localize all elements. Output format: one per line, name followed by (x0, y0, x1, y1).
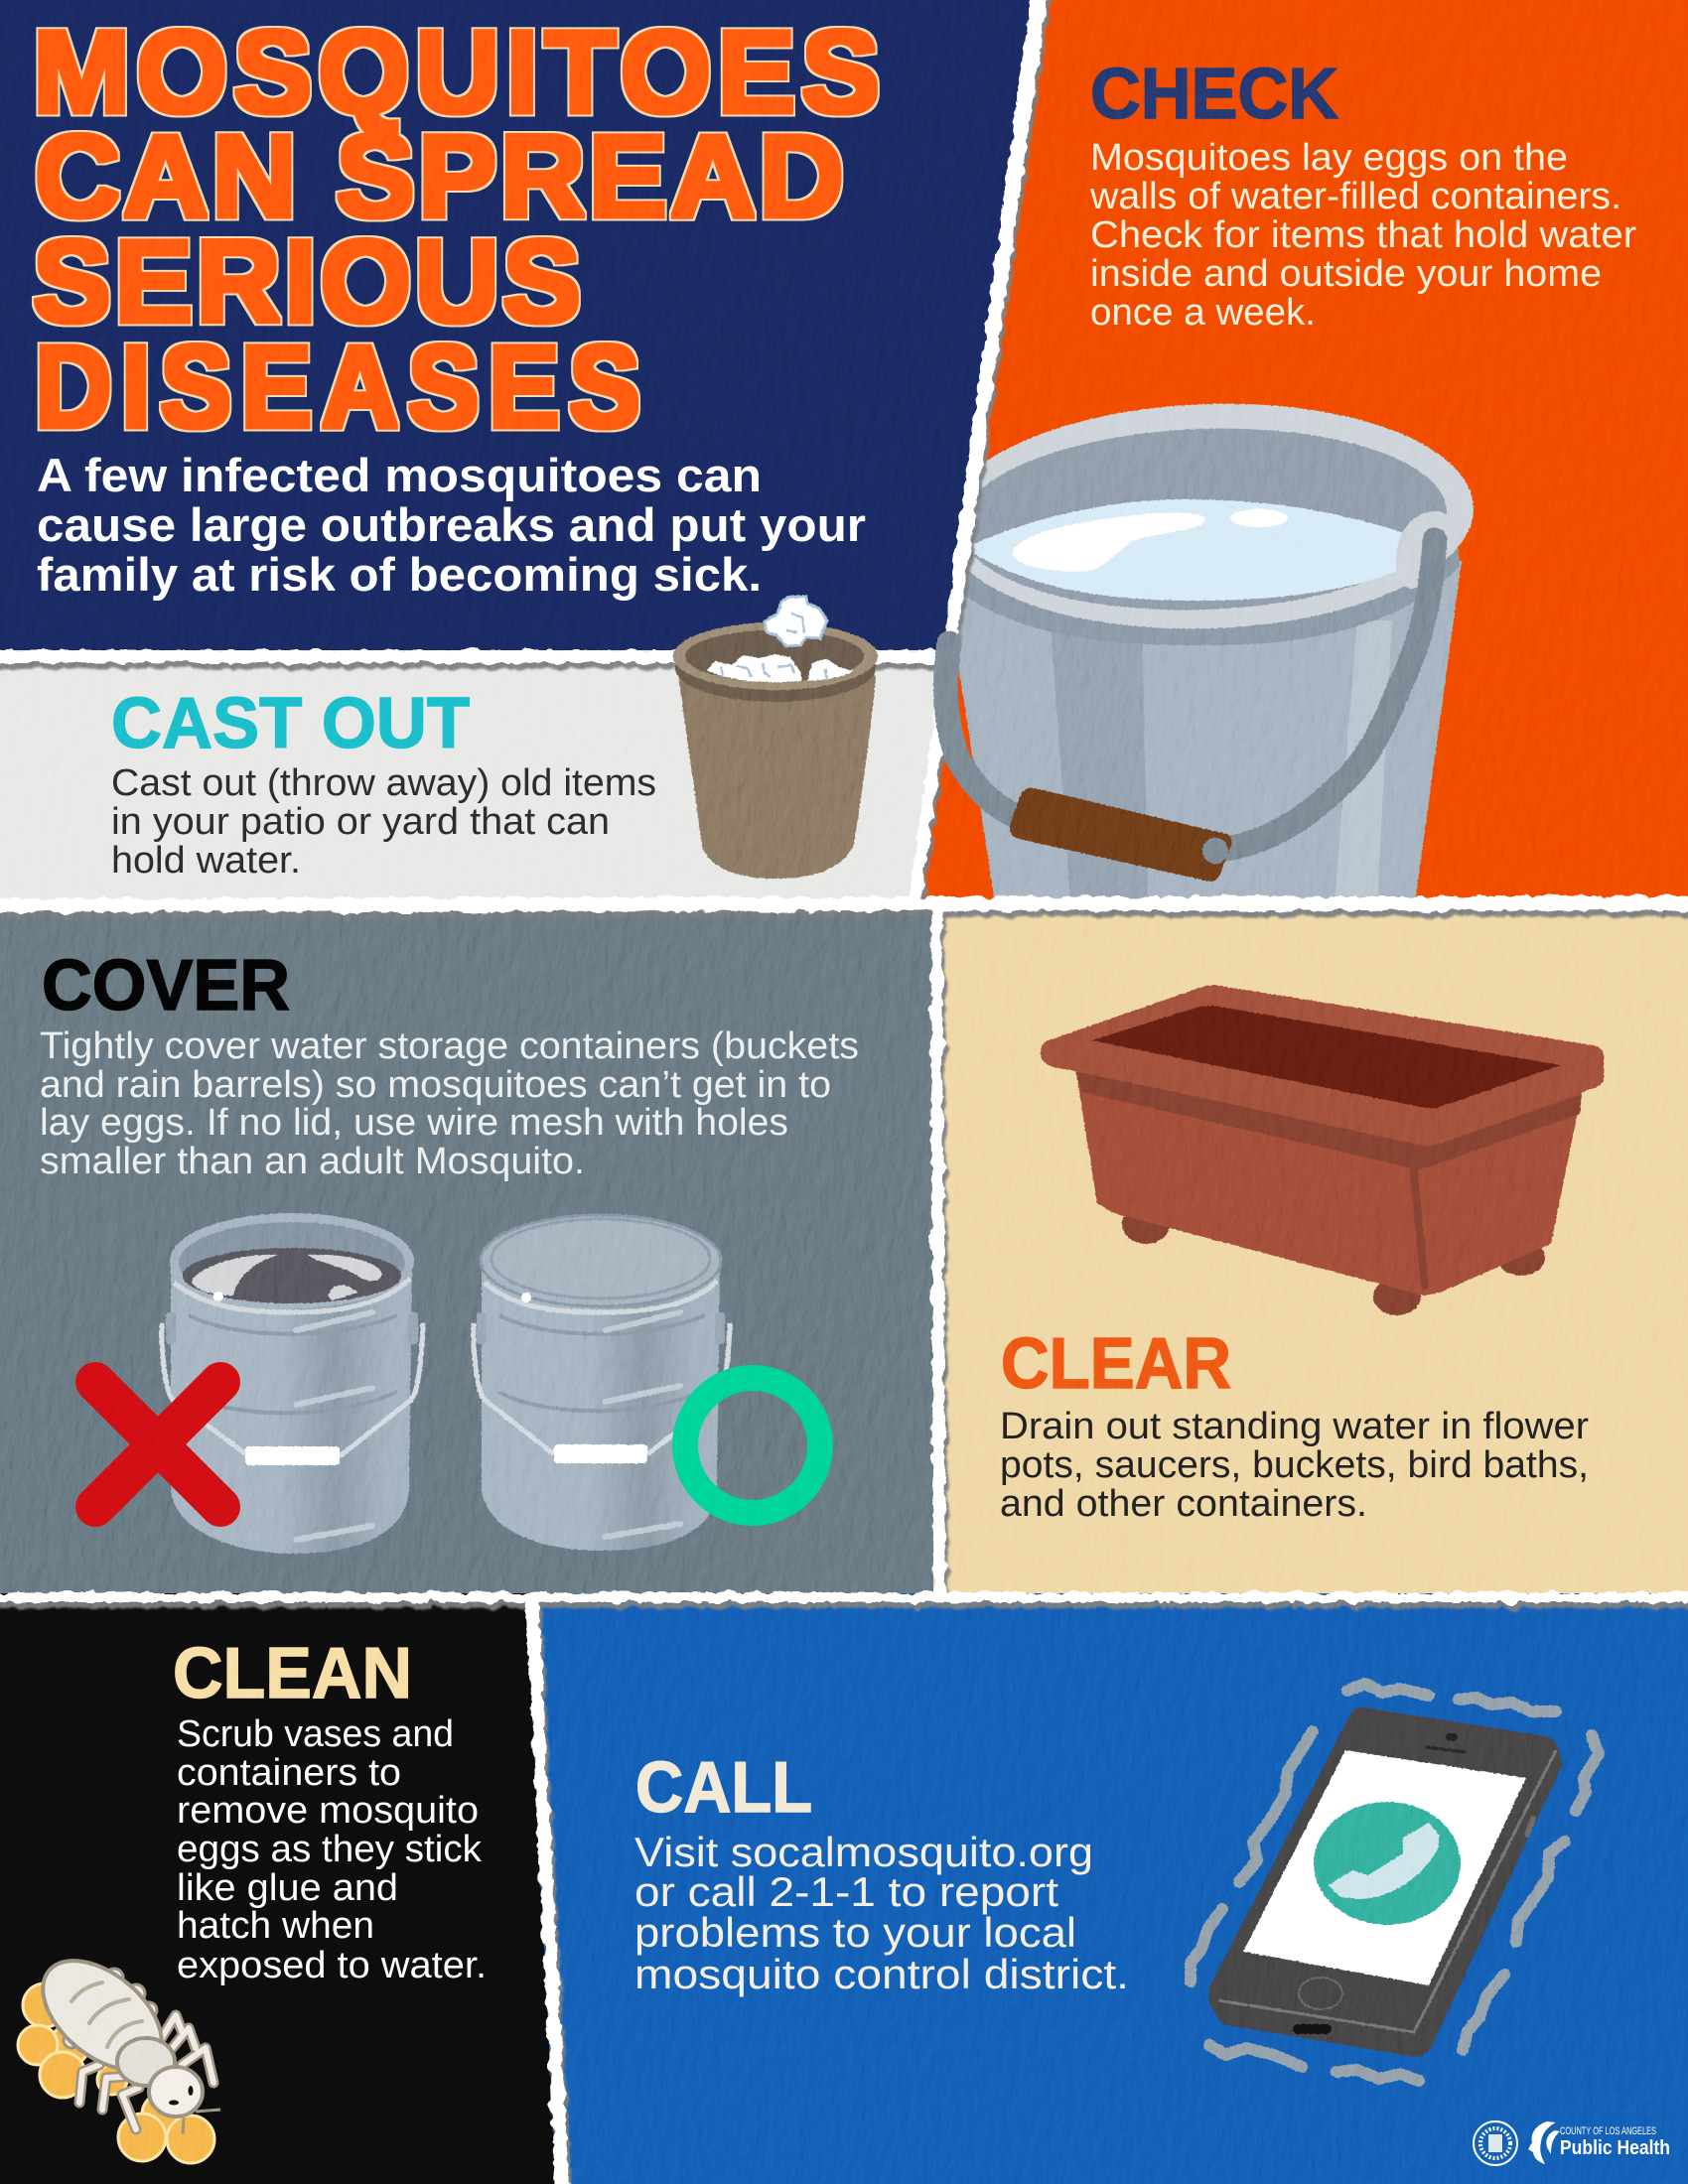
text: clean body: Scrub vases and (177, 1713, 454, 1755)
text: call body (634, 1829, 1129, 1997)
text: cast out body: Cast out (throw away) old items (111, 762, 656, 804)
text: check body: walls of water-filled containers. (1089, 176, 1621, 217)
text: clear body: pots, saucers, buckets, bird baths, (1000, 1444, 1589, 1486)
text: cover body (40, 1025, 859, 1182)
panel: clear (933, 905, 1688, 1595)
text: clean body: remove mosquito (177, 1790, 479, 1832)
text: clean body: eggs as they stick (177, 1829, 483, 1870)
text: clean body (177, 1713, 487, 1986)
heading: cast out: CAST OUT (111, 684, 470, 763)
text: subtitle: A few infected mosquitoes can (37, 449, 762, 501)
text: subtitle: cause large outbreaks and put your (37, 498, 866, 551)
icon: trash can (673, 597, 878, 879)
text: clear body (1000, 1406, 1589, 1525)
icon: green circle (685, 1378, 820, 1513)
text: clean body: like glue and (177, 1867, 398, 1909)
panel: cast out (0, 650, 948, 908)
title: SERIOUS (33, 216, 581, 347)
panel: cover (0, 905, 938, 1595)
text: check body (1089, 137, 1636, 334)
title: CAN SPREAD (35, 111, 844, 242)
text: clean body: hatch when (177, 1905, 374, 1947)
heading: cover: COVER (42, 946, 290, 1025)
title: DISEASES (35, 321, 640, 452)
text: call body: or call 2-1-1 to report (634, 1868, 1058, 1915)
text: clear body: Drain out standing water in flower (1000, 1406, 1589, 1447)
text: clean body: exposed to water. (177, 1945, 487, 1986)
text: check body: once a week. (1090, 292, 1316, 334)
text: clean body: containers to (177, 1752, 401, 1794)
text: check body: inside and outside your home (1090, 253, 1602, 295)
text: call body: Visit socalmosquito.org (634, 1829, 1093, 1875)
text: check body: Check for items that hold water (1090, 214, 1636, 256)
icon: planter box (1041, 985, 1604, 1315)
text: subtitle: family at risk of becoming sick. (37, 548, 762, 601)
text: call body: problems to your local (634, 1909, 1076, 1956)
text: cast out body: in your patio or yard that can (111, 801, 610, 843)
logo: county seal and public health (1474, 2121, 1670, 2165)
icon: covered pail (474, 1215, 730, 1551)
text: check body: Mosquitoes lay eggs on the (1090, 137, 1568, 179)
panel: clean (0, 1593, 566, 2184)
text: clear body: and other containers. (1000, 1483, 1367, 1525)
text: cover body: lay eggs. If no lid, use wire mesh with holes (40, 1102, 788, 1144)
icon: water bucket (939, 395, 1477, 903)
text: public health: Public Health (1560, 2137, 1670, 2159)
heading: check: CHECK (1090, 55, 1338, 134)
title (33, 7, 880, 452)
icon: uncovered pail (162, 1213, 423, 1554)
icon: larva and eggs (18, 1940, 220, 2163)
icon: county seal (1474, 2121, 1517, 2165)
panel: call (526, 1593, 1688, 2184)
text: cover body: and rain barrels) so mosquitoes can’t get in to (40, 1064, 831, 1106)
text: cast out body: hold water. (111, 840, 301, 882)
icon: vibrating phone (1191, 1684, 1599, 2081)
text: call body: mosquito control district. (634, 1951, 1129, 1997)
text: cover body: smaller than an adult Mosquito. (40, 1141, 585, 1182)
icon: red x (95, 1382, 220, 1507)
panel: header (0, 0, 1041, 665)
icon: bucket handle and grip (946, 643, 1231, 882)
heading: clean: CLEAN (173, 1634, 412, 1713)
text: cast out body (111, 762, 656, 882)
text: subtitle (37, 449, 866, 601)
heading: clear: CLEAR (1001, 1324, 1231, 1404)
text: cover body: Tightly cover water storage containers (buckets (40, 1025, 859, 1067)
heading: call: CALL (635, 1748, 812, 1828)
icon: public health profile (1528, 2121, 1560, 2164)
title: MOSQUITOES (33, 7, 880, 138)
panel: check (909, 0, 1688, 908)
